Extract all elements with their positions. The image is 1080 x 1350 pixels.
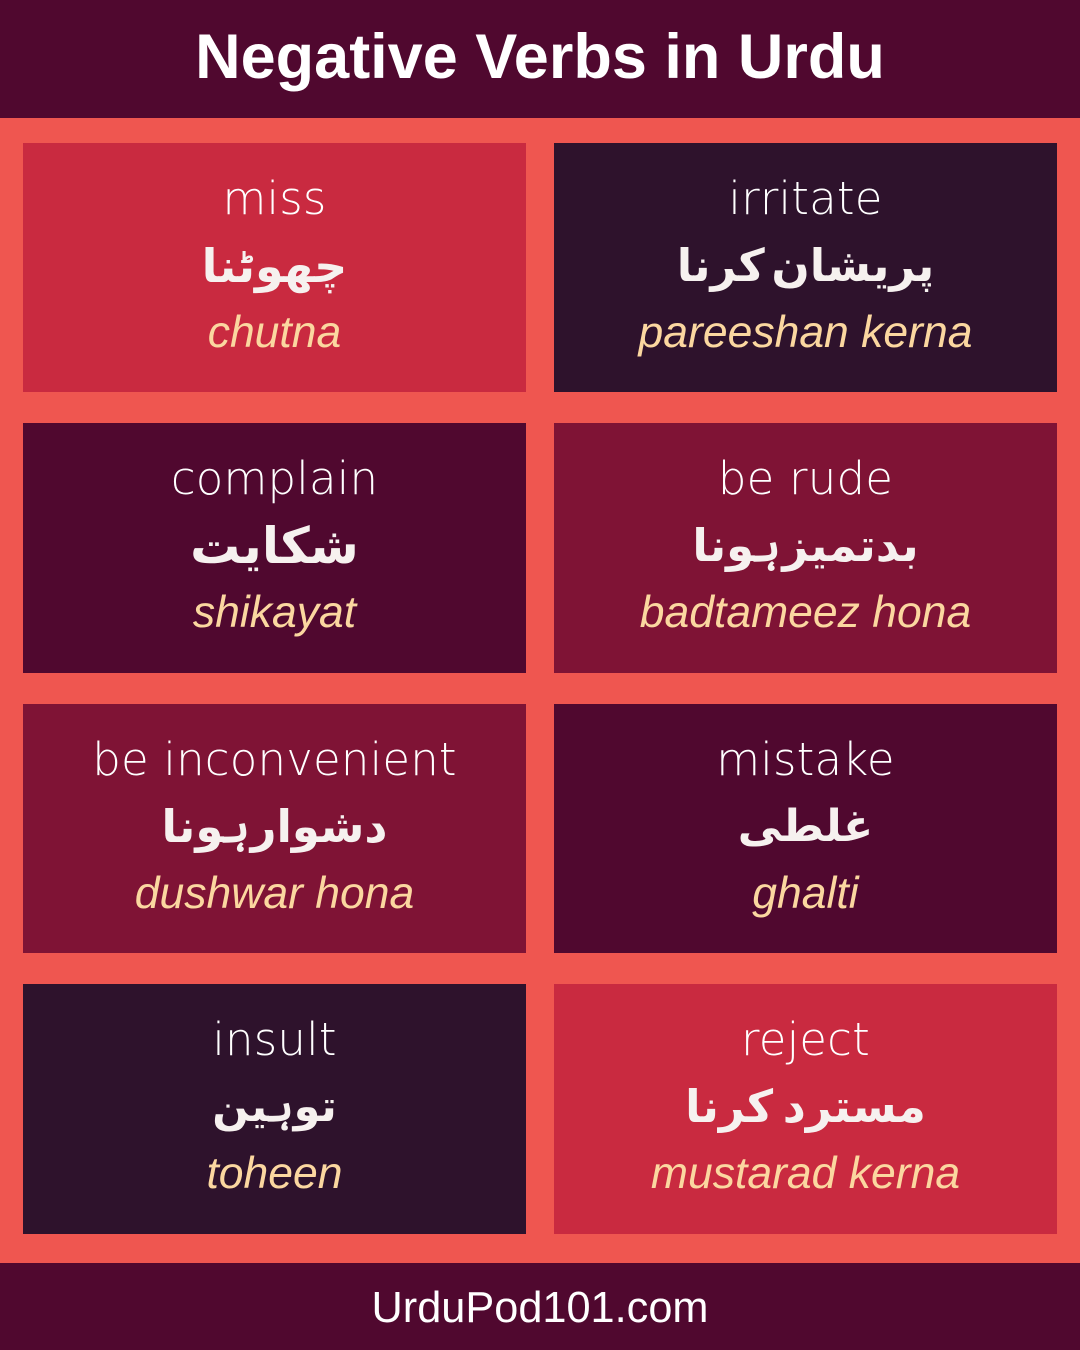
panel: be inconvenient: دشوار ہونا xyxy=(162,800,387,853)
panel: be rude xyxy=(554,423,1057,673)
panel: be inconvenient xyxy=(23,704,526,953)
panel: insult: insult xyxy=(212,1013,337,1066)
panel: insult: toheen xyxy=(206,1149,343,1198)
panel: reject xyxy=(554,984,1057,1234)
panel: miss: chutna xyxy=(208,308,341,357)
panel: be rude: be rude xyxy=(718,452,893,505)
panel: irritate xyxy=(554,143,1057,392)
panel: be inconvenient: be inconvenient xyxy=(92,733,457,786)
panel: miss: miss xyxy=(222,172,327,225)
panel: be rude: بدتمیز ہونا xyxy=(692,519,919,572)
panel: be rude: badtameez hona xyxy=(640,588,971,637)
panel: complain: complain xyxy=(171,452,378,505)
panel: complain: shikayat xyxy=(193,588,356,637)
panel: irritate: پریشان کرنا xyxy=(677,239,934,292)
panel: complain: شکایت xyxy=(190,517,359,575)
panel: insult xyxy=(23,984,526,1234)
panel: insult: توہین xyxy=(212,1082,337,1132)
title banner xyxy=(0,0,1080,118)
panel: be inconvenient: dushwar hona xyxy=(135,869,414,918)
title banner: Negative Verbs in Urdu xyxy=(195,22,885,92)
panel: reject: reject xyxy=(741,1013,870,1066)
panel: reject: mustarad kerna xyxy=(651,1149,960,1198)
panel: mistake: ghalti xyxy=(752,869,859,918)
panel: irritate: pareeshan kerna xyxy=(638,308,972,357)
panel: miss: چھوٹنا xyxy=(202,239,347,293)
panel: mistake: mistake xyxy=(716,733,895,786)
panel: mistake: غلطی xyxy=(738,801,873,852)
panel: reject: مسترد کرنا xyxy=(685,1080,926,1133)
footer website: UrduPod101.com xyxy=(372,1284,708,1332)
panel: irritate: irritate xyxy=(728,172,883,225)
panel: complain xyxy=(23,423,526,673)
panel: miss xyxy=(23,143,526,392)
panel: mistake xyxy=(554,704,1057,953)
footer website xyxy=(0,1263,1080,1350)
